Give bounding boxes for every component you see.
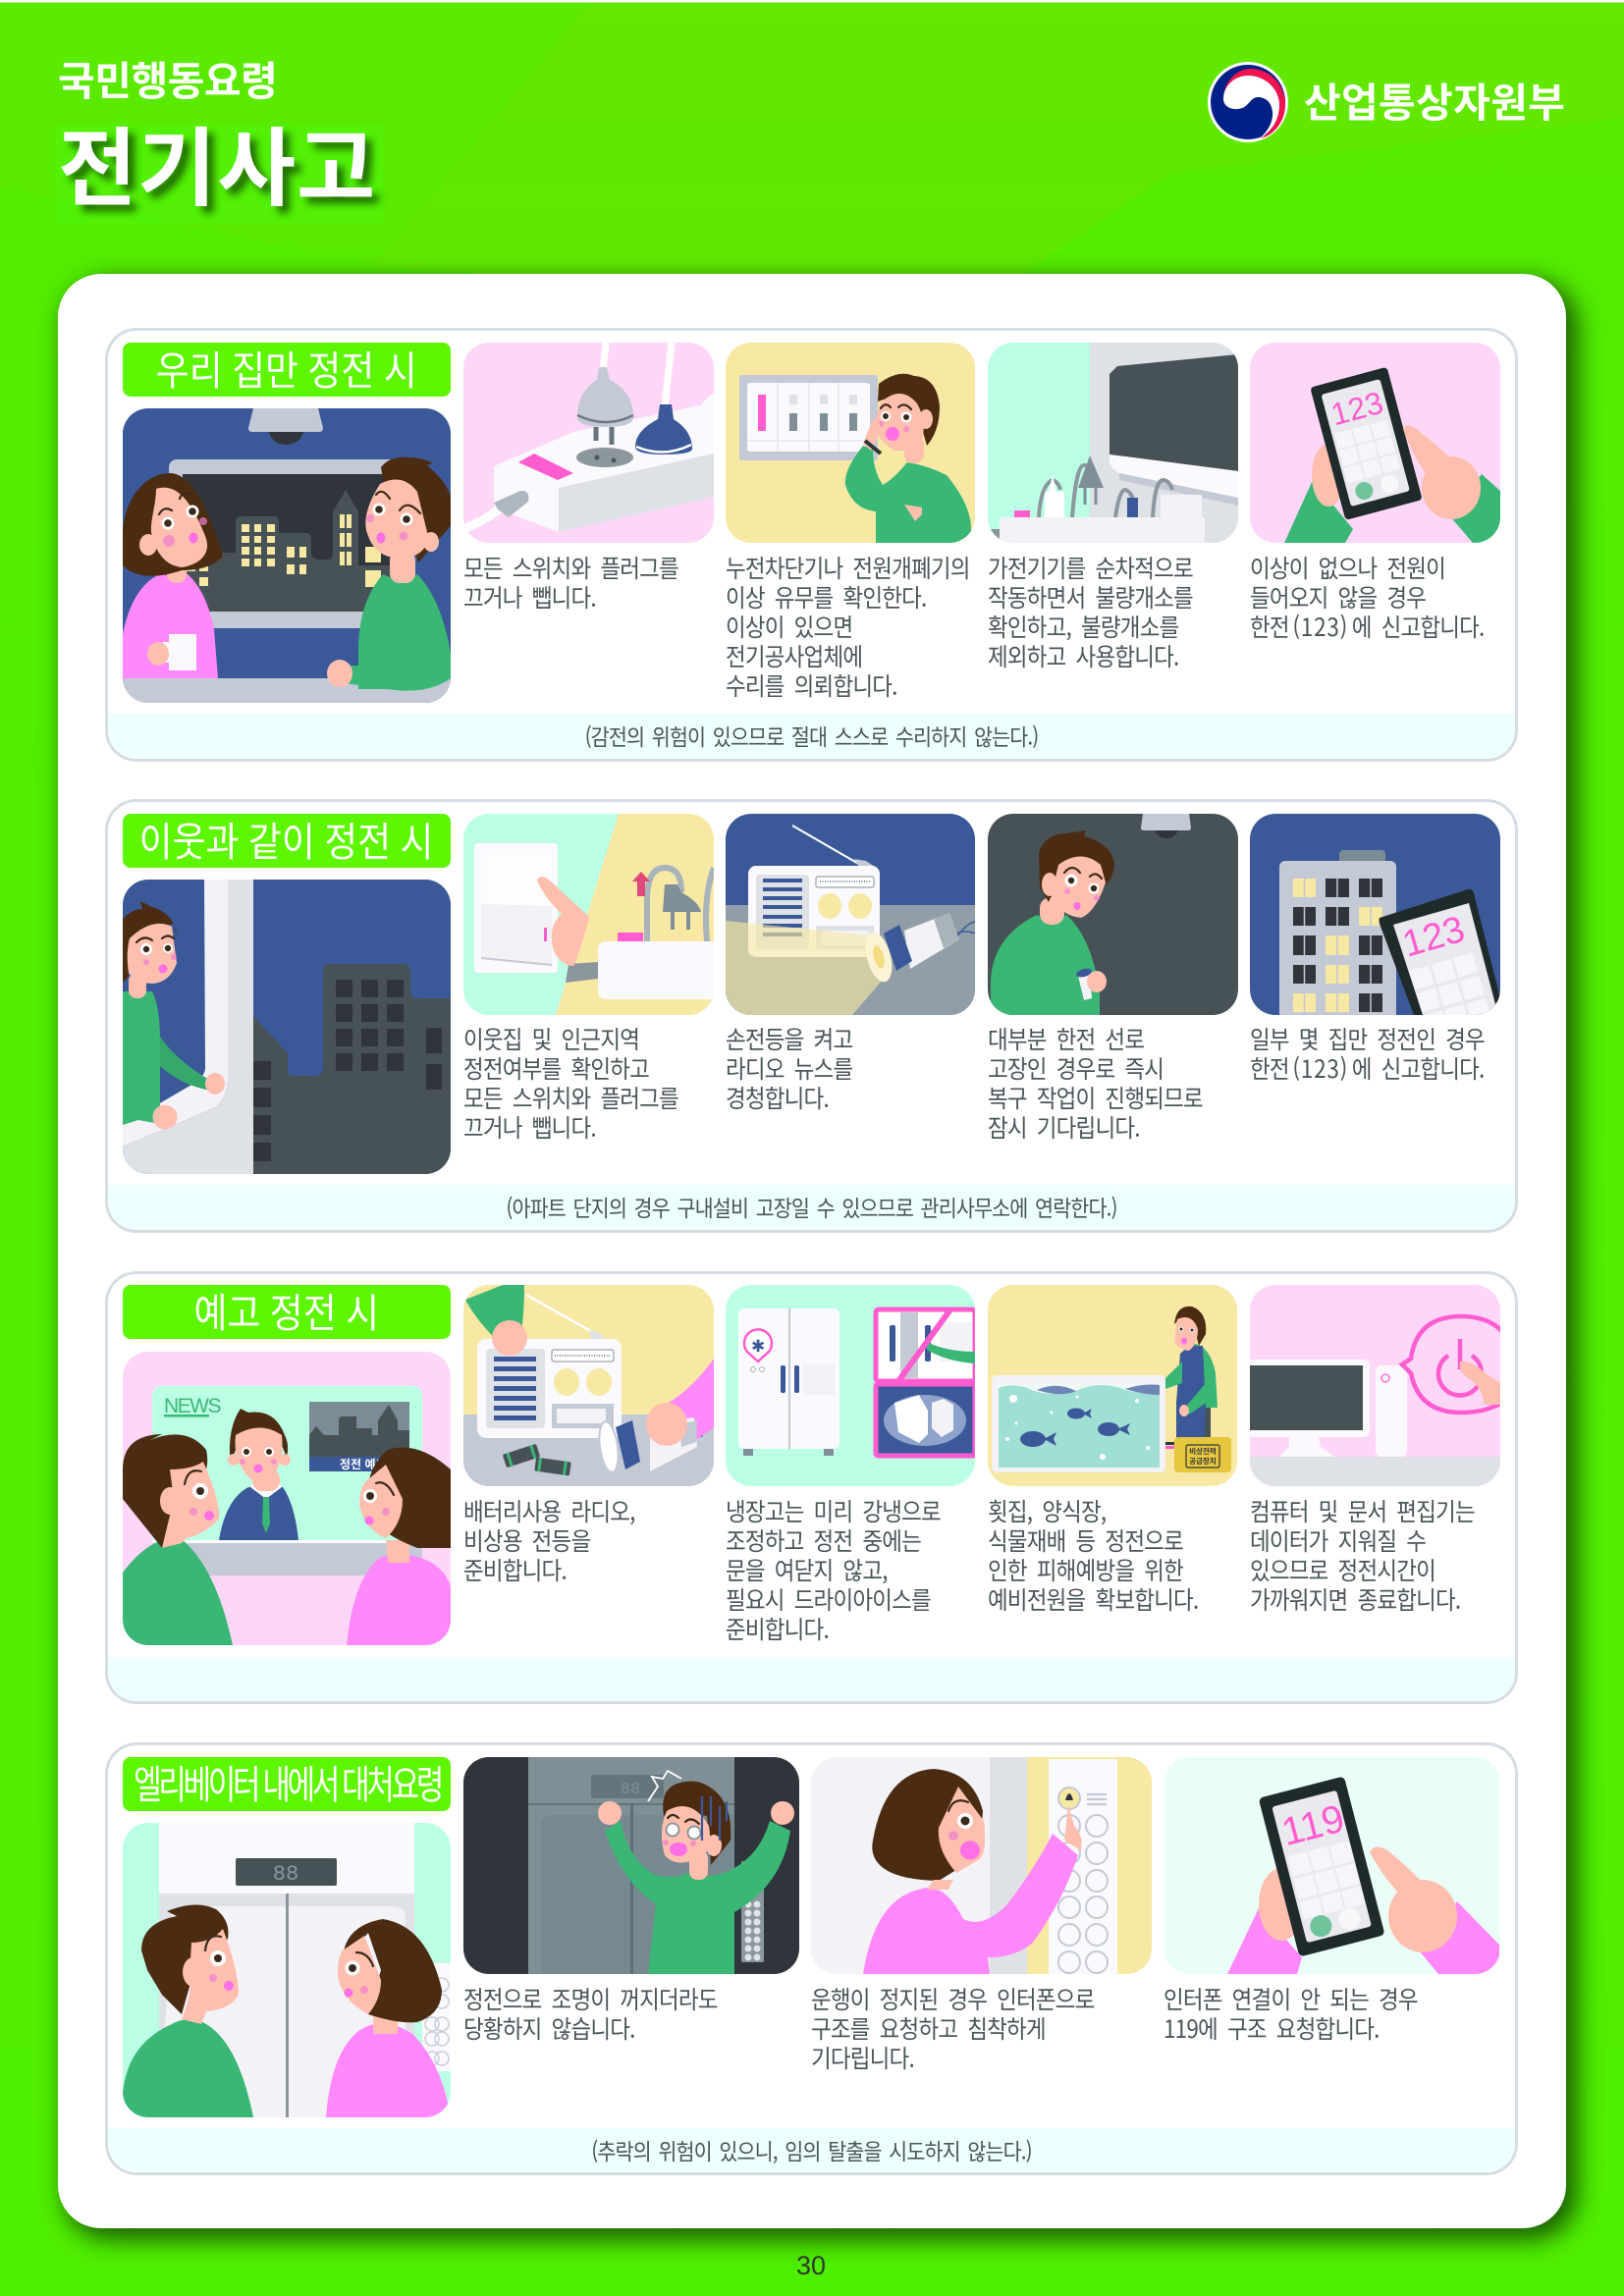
step text 2: 조정하고 정전 중에는 <box>726 1522 921 1558</box>
illustration: power strip and plugs <box>463 343 714 543</box>
footnote band: (감전의 위험이 있으므로 절대 스스로 수리하지 않는다.) <box>585 719 1038 752</box>
panel: white card <box>58 274 1566 2228</box>
heading <box>123 1285 451 1339</box>
step text 4: 이상이 없으나 전원이 <box>1250 550 1445 585</box>
footnote band <box>108 2128 1515 2172</box>
footnote band: (아파트 단지의 경우 구내설비 고장일 수 있으므로 관리사무소에 연락한다.) <box>506 1190 1117 1223</box>
illustration: man looking out of window <box>123 880 451 1174</box>
step text 4: 일부 몇 집만 정전인 경우 <box>1250 1021 1485 1056</box>
step text 4: 컴퓨터 및 문서 편집기는 <box>1250 1493 1475 1528</box>
illustration: fridge and dry ice <box>726 1285 975 1486</box>
footnote band <box>108 714 1515 759</box>
step text 2: 전기공사업체에 <box>726 638 862 673</box>
step text 3: 인터폰 연결이 안 되는 경우 <box>1164 1981 1418 2016</box>
step text 4: 가까워지면 종료합니다. <box>1250 1581 1460 1617</box>
ministry name: 산업통상자원부 <box>1304 70 1565 129</box>
illustration: switch and plug <box>463 814 714 1015</box>
step text 3 <box>1164 1981 1418 2046</box>
step text 3 <box>988 1021 1203 1145</box>
step text 2 <box>726 1493 941 1646</box>
step text 3: 식물재배 등 정전으로 <box>988 1522 1183 1558</box>
step text 1: 이웃집 및 인근지역 <box>463 1021 639 1056</box>
panel: power cut with neighbours <box>105 799 1518 1233</box>
step text 4: 한전(123)에 신고합니다. <box>1250 609 1485 644</box>
title: 전기사고 <box>58 100 376 224</box>
page number: 30 <box>796 2251 826 2280</box>
step text 1: 끄거나 뺍니다. <box>463 1109 596 1145</box>
panel: inside elevator <box>105 1742 1518 2175</box>
step text 1: 배터리사용 라디오, <box>463 1493 635 1528</box>
step text 2: 냉장고는 미리 강냉으로 <box>726 1493 941 1528</box>
step text 3: 예비전원을 확보합니다. <box>988 1581 1198 1617</box>
step text 2: 라디오 뉴스를 <box>726 1050 852 1086</box>
step text 3: 가전기기를 순차적으로 <box>988 550 1193 585</box>
step text 1: 정전으로 조명이 꺼지더라도 <box>463 1981 718 2016</box>
illustration: couple at elevator <box>123 1823 451 2117</box>
step text 4: 있으므로 정전시간이 <box>1250 1552 1435 1587</box>
illustration: man waiting with flashlight <box>988 814 1238 1015</box>
illustration: panicked man in dark elevator <box>463 1757 799 1974</box>
step text 4: 데이터가 지워질 수 <box>1250 1522 1426 1558</box>
illustration: panicked man in dark elevator: 88 <box>621 1781 640 1799</box>
illustration: building and 123 phone: 123 <box>1398 909 1469 966</box>
illustration: aquarium with backup power <box>988 1285 1237 1486</box>
illustration: man checking breaker panel <box>726 343 975 543</box>
footnote band <box>108 1185 1515 1230</box>
step text 3: 작동하면서 불량개소를 <box>988 579 1193 614</box>
illustration: couple at elevator: 88 <box>273 1862 298 1887</box>
illustration: radio, flashlight and batteries <box>463 1285 714 1486</box>
step text 3: 인한 피해예방을 위한 <box>988 1552 1183 1587</box>
step text 1 <box>463 550 678 614</box>
panel: power cut only in my home <box>105 328 1518 762</box>
step text 2: 이상 유무를 확인한다. <box>726 579 926 614</box>
step text 2 <box>726 550 970 703</box>
illustration: computer power off <box>1250 1285 1500 1486</box>
step text 4 <box>1250 1493 1475 1617</box>
step text 4 <box>1250 550 1485 644</box>
step text 1: 비상용 전등을 <box>463 1522 590 1558</box>
step text 1 <box>463 1981 718 2046</box>
step text 3: 잠시 기다립니다. <box>988 1109 1140 1145</box>
illustration: aquarium with backup power: 비상전력 <box>1189 1446 1217 1457</box>
step text 1: 준비합니다. <box>463 1552 567 1587</box>
step text 3: 확인하고, 불량개소를 <box>988 609 1178 644</box>
step text 1: 정전여부를 확인하고 <box>463 1050 649 1086</box>
step text 3: 제외하고 사용합니다. <box>988 638 1178 673</box>
illustration: phone dialling 123 <box>1250 343 1500 543</box>
step text 2: 누전차단기나 전원개폐기의 <box>726 550 970 585</box>
step text 1: 모든 스위치와 플러그를 <box>463 1080 678 1115</box>
step text 1 <box>463 1021 678 1145</box>
step text 2: 손전등을 켜고 <box>726 1021 852 1056</box>
step text 2: 경청합니다. <box>726 1080 829 1115</box>
step text 3: 복구 작업이 진행되므로 <box>988 1080 1203 1115</box>
step text 3: 고장인 경우로 즉시 <box>988 1050 1164 1086</box>
step text 4: 들어오지 않을 경우 <box>1250 579 1426 614</box>
illustration: phone dialling 119 <box>1164 1757 1500 1974</box>
illustration: watching TV news: NEWS <box>164 1395 221 1417</box>
step text 2 <box>726 1021 852 1115</box>
step text 4 <box>1250 1021 1485 1086</box>
step text 1: 모든 스위치와 플러그를 <box>463 550 678 585</box>
illustration: fridge and dry ice: ✱ <box>751 1337 765 1357</box>
illustration: phone dialling 119: 119 <box>1277 1797 1349 1854</box>
step text 2: 문을 여닫지 않고, <box>726 1552 888 1587</box>
step text 1: 끄거나 뺍니다. <box>463 579 596 614</box>
subtitle: 국민행동요령 <box>58 48 277 107</box>
icon: government emblem <box>1208 62 1288 142</box>
illustration: TV and plugs <box>988 343 1238 543</box>
step text 1: 당황하지 않습니다. <box>463 2010 635 2046</box>
step text 3: 119에 구조 요청합니다. <box>1164 2010 1380 2046</box>
illustration: watching TV news: 정전 예고 <box>340 1456 387 1472</box>
step text 2: 필요시 드라이아이스를 <box>726 1581 931 1617</box>
step text 2: 운행이 정지된 경우 인터폰으로 <box>811 1981 1095 2016</box>
step text 3 <box>988 1493 1198 1617</box>
illustration: couple at window <box>123 408 451 703</box>
step text 3: 대부분 한전 선로 <box>988 1021 1144 1056</box>
illustration: aquarium with backup power: 공급장치 <box>1189 1456 1217 1467</box>
step text 2: 기다립니다. <box>811 2040 914 2075</box>
illustration: phone dialling 123: 123 <box>1327 385 1387 432</box>
step text 2 <box>811 1981 1095 2075</box>
illustration: radio and flashlight <box>726 814 975 1015</box>
step text 1 <box>463 1493 635 1587</box>
step text 2: 준비합니다. <box>726 1611 829 1646</box>
empty band <box>108 1657 1515 1701</box>
illustration: building and 123 phone <box>1250 814 1500 1015</box>
illustration: woman pressing intercom button <box>811 1757 1152 1974</box>
step text 2: 수리를 의뢰합니다. <box>726 667 897 703</box>
step text 2: 구조를 요청하고 침착하게 <box>811 2010 1046 2046</box>
panel: planned outage <box>105 1271 1518 1704</box>
illustration: watching TV news <box>123 1352 451 1645</box>
step text 4: 한전(123)에 신고합니다. <box>1250 1050 1485 1086</box>
step text 2: 이상이 있으면 <box>726 609 852 644</box>
step text 3 <box>988 550 1193 673</box>
step text 3: 횟집, 양식장, <box>988 1493 1106 1528</box>
footnote band: (추락의 위험이 있으니, 임의 탈출을 시도하지 않는다.) <box>591 2133 1032 2166</box>
